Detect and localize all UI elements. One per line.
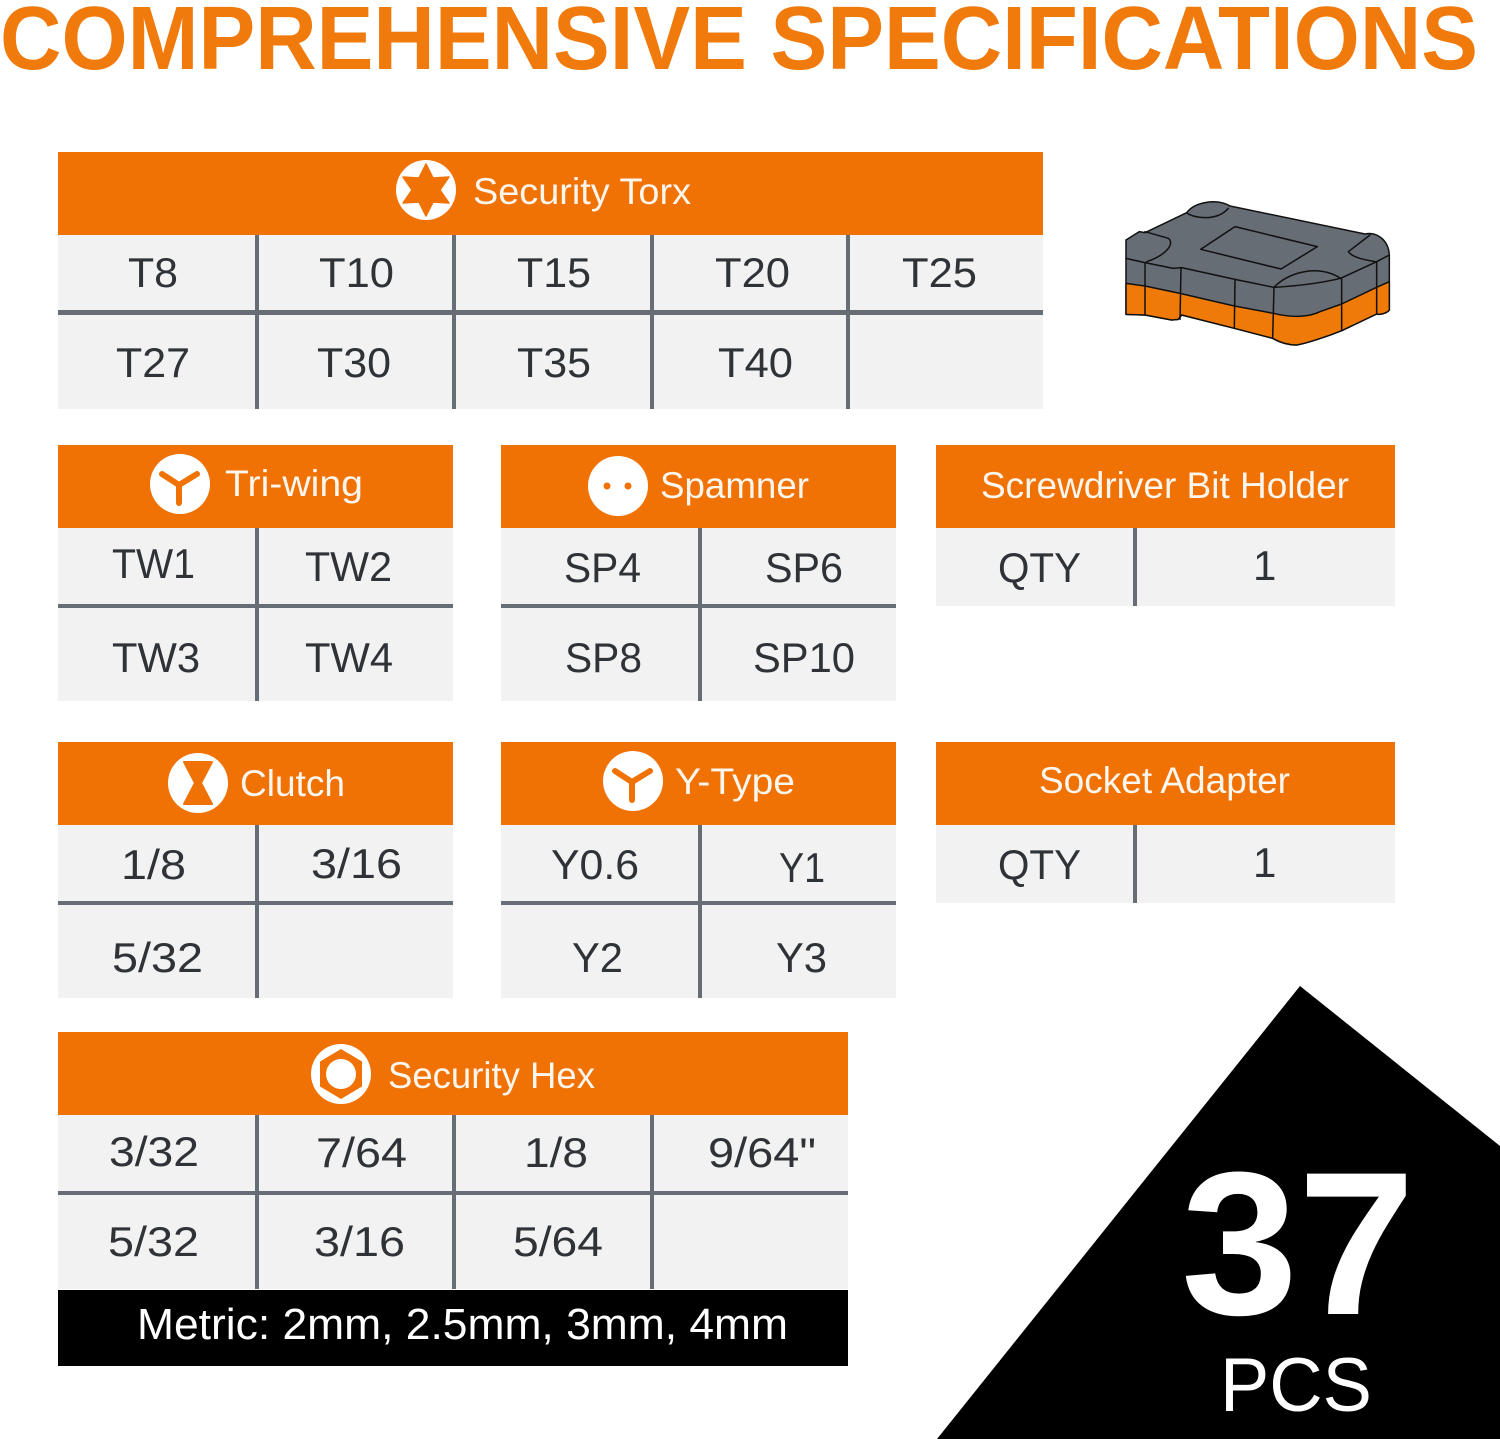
bit holder quantity xyxy=(998,542,1276,591)
security hex sizes: 5/64 xyxy=(513,1218,603,1265)
heading: socket adapter: Socket Adapter xyxy=(1039,760,1290,801)
spanner sizes xyxy=(564,544,855,681)
tri-wing sizes: TW3 xyxy=(112,634,200,681)
y-type sizes xyxy=(551,841,827,981)
icon: clutch xyxy=(168,753,228,813)
heading: screwdriver bit holder: Screwdriver Bit Holder xyxy=(981,465,1349,506)
y-type sizes: Y2 xyxy=(572,934,623,981)
bit holder quantity: QTY xyxy=(998,544,1081,591)
y-type sizes: Y3 xyxy=(776,934,827,981)
heading: security torx: Security Torx xyxy=(473,171,692,212)
tri-wing sizes: TW2 xyxy=(305,543,392,590)
panel: y-type xyxy=(501,742,896,998)
security hex sizes: 3/32 xyxy=(109,1128,199,1175)
torx sizes: T30 xyxy=(317,339,391,386)
panel: security torx xyxy=(58,152,1043,409)
metric sizes bar xyxy=(58,1290,848,1366)
clutch sizes: 5/32 xyxy=(112,934,203,981)
socket adapter quantity: 1 xyxy=(1253,839,1276,886)
heading: clutch: Clutch xyxy=(240,763,345,804)
spanner sizes: SP6 xyxy=(765,544,843,591)
security hex sizes: 5/32 xyxy=(108,1218,199,1265)
y-type sizes: Y1 xyxy=(779,844,825,891)
security hex sizes: 7/64 xyxy=(316,1129,407,1176)
clutch sizes xyxy=(112,840,402,981)
panel: socket adapter xyxy=(936,742,1395,903)
spanner sizes: SP8 xyxy=(565,634,642,681)
icon: y-type xyxy=(603,751,663,811)
torx sizes: T20 xyxy=(715,249,790,296)
security hex sizes: 9/64" xyxy=(708,1129,816,1176)
panel: screwdriver bit holder xyxy=(936,445,1395,606)
torx sizes: T35 xyxy=(517,339,591,386)
torx sizes xyxy=(116,249,977,386)
panel: tri-wing xyxy=(58,445,453,701)
icon: tri-wing xyxy=(150,454,210,514)
clutch sizes: 3/16 xyxy=(311,840,402,887)
socket adapter quantity: QTY xyxy=(998,841,1081,888)
badge: 37 pcs: 37 xyxy=(1181,1130,1415,1358)
torx sizes: T40 xyxy=(718,339,793,386)
torx sizes: T10 xyxy=(319,249,394,296)
torx sizes: T25 xyxy=(902,249,977,296)
socket adapter quantity xyxy=(998,839,1276,888)
badge: 37 pcs xyxy=(937,986,1500,1439)
heading: spanner: Spamner xyxy=(660,465,809,506)
metric sizes bar: Metric: 2mm, 2.5mm, 3mm, 4mm xyxy=(137,1300,788,1349)
security hex sizes: 1/8 xyxy=(524,1129,588,1176)
tri-wing sizes xyxy=(112,540,393,681)
security hex sizes: 3/16 xyxy=(314,1218,405,1265)
security hex sizes xyxy=(108,1128,816,1265)
icon: torx star xyxy=(396,160,456,220)
y-type sizes: Y0.6 xyxy=(551,841,639,888)
torx sizes: T8 xyxy=(128,249,178,296)
tri-wing sizes: TW1 xyxy=(112,540,195,587)
badge: 37 pcs: PCS xyxy=(1220,1343,1372,1428)
heading: y-type: Y-Type xyxy=(675,761,795,802)
icon: security hex xyxy=(311,1044,371,1104)
icon: spanner xyxy=(588,456,648,516)
heading: tri-wing: Tri-wing xyxy=(225,463,363,504)
panel: spanner xyxy=(501,445,896,701)
tri-wing sizes: TW4 xyxy=(305,634,393,681)
bit holder quantity: 1 xyxy=(1253,542,1276,589)
clutch sizes: 1/8 xyxy=(121,841,186,888)
torx sizes: T27 xyxy=(116,339,190,386)
torx sizes: T15 xyxy=(517,249,591,296)
panel: clutch xyxy=(58,742,453,998)
panel: security hex xyxy=(58,1032,848,1366)
icon: bit storage case xyxy=(1126,202,1389,345)
heading: security hex: Security Hex xyxy=(388,1055,595,1096)
spanner sizes: SP10 xyxy=(753,634,855,681)
spanner sizes: SP4 xyxy=(564,544,641,591)
